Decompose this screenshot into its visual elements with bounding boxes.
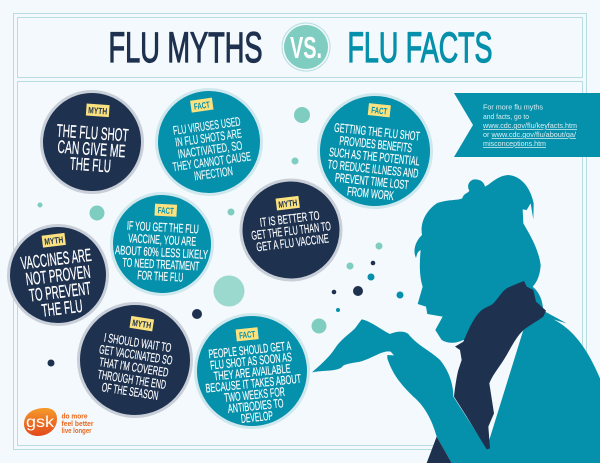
callout: more flu myths and facts: and facts, go to [483, 112, 529, 121]
logo tagline [62, 414, 94, 435]
myth: better to get the flu: GET A FLU VACCINE [256, 232, 330, 254]
fact: flu viruses are inactivated: THEY CANNOT CAUSE [172, 149, 252, 174]
fact: benefits of the flu shot [313, 89, 437, 213]
myth: wait to get vaccinated: I SHOULD WAIT TO [103, 331, 173, 355]
logo: gsk: gsk [26, 414, 55, 431]
fact: get a flu shot as soon as available [190, 309, 314, 433]
fact: get a flu shot as soon as available: DEVELOP [240, 409, 274, 426]
fact: get a flu shot as soon as available: FACT [239, 329, 256, 341]
badge: vs. [282, 23, 330, 71]
fact: benefits of the flu shot: SUCH AS THE POTENTIAL [328, 145, 420, 168]
myth: wait to get vaccinated [70, 295, 200, 425]
logo: gsk [24, 408, 57, 436]
fact: get a flu shot as soon as available: PEOPLE SHOULD GET A [208, 339, 292, 361]
fact: 60% less likely to need treatment: FOR THE FLU [137, 268, 184, 285]
fact: benefits of the flu shot: GETTING THE FLU SHOT [333, 121, 421, 144]
myth: vaccines are not proven [3, 220, 113, 330]
myth: the flu shot can give me the flu: MYTH [88, 105, 108, 116]
fact: get a flu shot as soon as available: THEY ARE AVAILABLE [213, 362, 291, 383]
fact: benefits of the flu shot: FROM WORK [346, 184, 395, 203]
callout: more flu myths and facts: or www.cdc.gov/flu/about/qa/ [483, 130, 577, 139]
callout: more flu myths and facts: For more flu myths [483, 102, 543, 112]
myth: vaccines are not proven: TO PREVENT [28, 278, 92, 306]
myth: vaccines are not proven: THE FLU [41, 296, 84, 321]
myth: the flu shot can give me the flu: THE FLU [69, 154, 112, 176]
fact: benefits of the flu shot: TO REDUCE ILLNESS AND [327, 157, 419, 181]
fact: 60% less likely to need treatment: FACT [157, 205, 174, 216]
myth: wait to get vaccinated: THROUGH THE END [97, 367, 167, 392]
myth: the flu shot can give me the flu [38, 88, 146, 196]
myth: better to get the flu: GET THE FLU THAN TO [251, 219, 332, 243]
logo tagline: live longer [62, 428, 92, 435]
myth: better to get the flu: MYTH [278, 198, 298, 210]
title: flu myths: FLU MYTHS [108, 24, 262, 72]
callout: more flu myths and facts: www.cdc.gov/flu/keyfacts.htm [482, 121, 577, 130]
decorative bubbles [38, 107, 404, 366]
fact: 60% less likely to need treatment [109, 191, 215, 297]
fact: flu viruses are inactivated: FACT [193, 100, 211, 112]
fact: flu viruses are inactivated [150, 83, 268, 201]
myth: wait to get vaccinated: THAT I'M COVERED [98, 355, 169, 380]
fact: 60% less likely to need treatment: TO NEED TREATMENT [122, 255, 200, 273]
fact: get a flu shot as soon as available: BECAUSE IT TAKES ABOUT [205, 372, 302, 396]
myth: wait to get vaccinated: MYTH [132, 318, 152, 331]
myth: the flu shot can give me the flu: CAN GIVE ME [57, 137, 126, 161]
myth: the flu shot can give me the flu: THE FLU SHOT [56, 121, 129, 146]
title: flu facts: FLU FACTS [348, 24, 492, 72]
myth: vaccines are not proven: MYTH [44, 235, 64, 247]
myth: better to get the flu: IT IS BETTER TO [259, 208, 320, 230]
callout: more flu myths and facts [454, 93, 600, 157]
badge: vs.: VS. [290, 30, 322, 65]
logo tagline: do more [62, 414, 88, 420]
fact: 60% less likely to need treatment: IF YOU GET THE FLU [127, 219, 199, 236]
myth: wait to get vaccinated: GET VACCINATED SO [98, 342, 174, 368]
fact: 60% less likely to need treatment: VACCINE, YOU ARE [128, 231, 197, 249]
fact: benefits of the flu shot: PREVENT TIME LOST [334, 171, 410, 192]
fact: get a flu shot as soon as available: TWO WEEKS FOR [223, 385, 286, 405]
fact: 60% less likely to need treatment: ABOUT 60% LESS LIKELY [115, 243, 209, 262]
fact: flu viruses are inactivated: INACTIVATED, SO [177, 138, 243, 161]
fact: get a flu shot as soon as available: FLU SHOT AS SOON AS [209, 350, 292, 373]
myth: vaccines are not proven: NOT PROVEN [25, 262, 92, 289]
fact: flu viruses are inactivated: FLU VIRUSES USED [172, 114, 241, 138]
fact: benefits of the flu shot: FACT [371, 105, 388, 117]
fact: get a flu shot as soon as available: ANTIBODIES TO [227, 396, 284, 416]
callout: more flu myths and facts: misconceptions.htm [483, 139, 546, 148]
myth: wait to get vaccinated: OF THE SEASON [101, 380, 159, 403]
fact: flu viruses are inactivated: INFECTION [193, 164, 234, 183]
myth: better to get the flu [235, 174, 347, 286]
figure: woman sneezing silhouette [312, 175, 600, 463]
fact: flu viruses are inactivated: IN FLU SHOTS ARE [174, 126, 243, 150]
logo tagline: feel better [62, 421, 94, 428]
fact: benefits of the flu shot: PROVIDES BENEFITS [339, 134, 413, 155]
myth: vaccines are not proven: VACCINES ARE [20, 245, 93, 273]
